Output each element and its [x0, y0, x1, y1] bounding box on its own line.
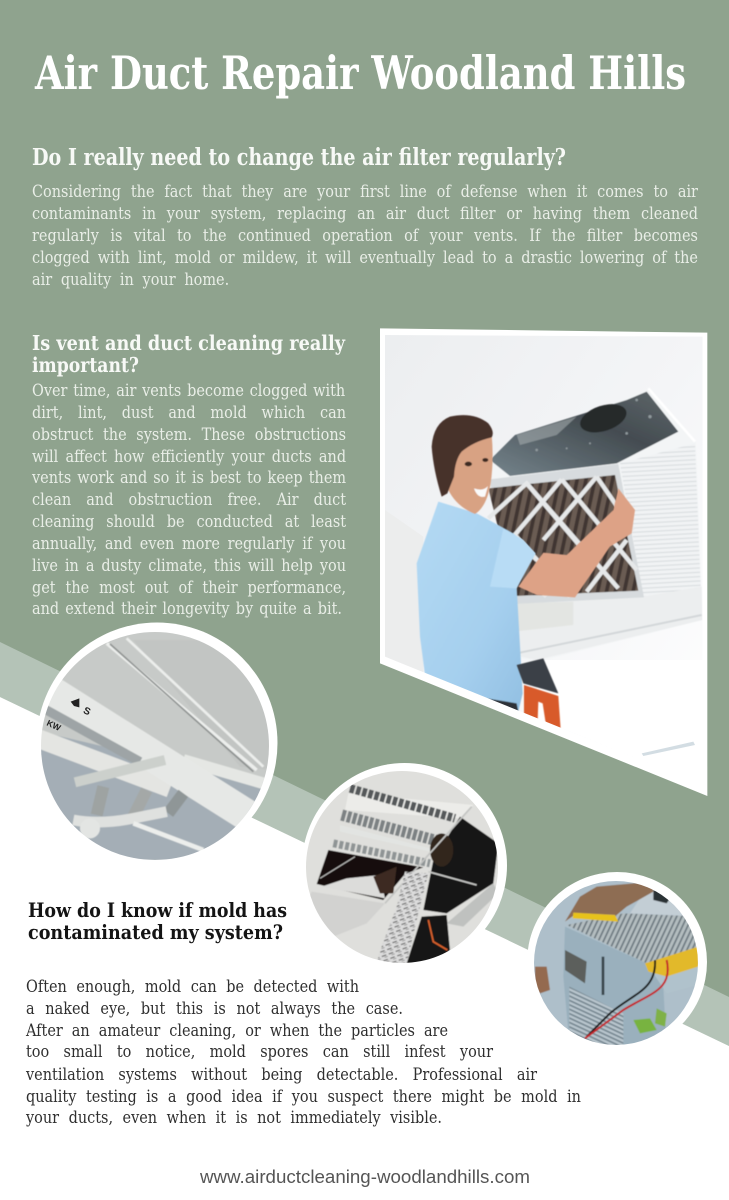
- text block: vent and duct cleaning answer: dirt, lint, dust and mold which can: [32, 403, 346, 423]
- photo circle: white ceiling pipes: S: [81, 705, 92, 718]
- photo circle: technician testing HVAC unit: [527, 872, 707, 1052]
- heading: vent and duct cleaning: important?: [32, 353, 139, 377]
- text block: vent and duct cleaning answer: clean and obstruction free. Air duct: [32, 490, 346, 510]
- photo circle: white ceiling pipes: KW: [45, 718, 63, 733]
- heading: vent and duct cleaning: [32, 331, 346, 377]
- text block: vent and duct cleaning answer: vents work and so it is best to keep them: [32, 468, 346, 488]
- text block: vent and duct cleaning answer: [32, 381, 346, 619]
- vent frame: [488, 388, 702, 662]
- man: [417, 415, 635, 712]
- text block: mold contamination answer: a naked eye, but this is not always the case.: [26, 999, 403, 1019]
- text block: mold contamination answer: your ducts, even when it is not immediately visible.: [26, 1108, 442, 1128]
- text block: vent and duct cleaning answer: obstruct the system. These obstructions: [32, 425, 346, 445]
- text block: mold contamination answer: ventilation systems without being detectable. Professional air: [26, 1065, 537, 1085]
- heading: mold contamination: [28, 899, 287, 944]
- text block: air filter answer: [32, 182, 698, 290]
- air filter: [489, 464, 644, 604]
- text block: mold contamination answer: [26, 977, 581, 1128]
- text block: vent and duct cleaning answer: Over time, air vents become clogged with: [32, 381, 345, 401]
- ladder: [517, 658, 561, 729]
- heading: vent and duct cleaning: Is vent and duct cleaning really: [32, 331, 346, 355]
- text block: mold contamination answer: After an amateur cleaning, or when the particles are: [26, 1021, 448, 1041]
- text block: mold contamination answer: too small to notice, mold spores can still infest your: [26, 1042, 493, 1062]
- text block: vent and duct cleaning answer: annually, and even more regularly if you: [32, 534, 346, 554]
- text block: air filter answer: regularly is vital to the continued operation of your vents. If the filter becomes: [32, 226, 698, 246]
- text block: vent and duct cleaning answer: will affect how efficiently your ducts and: [32, 447, 346, 467]
- photo: technician replacing air filter: [380, 328, 707, 796]
- footer website address: www.airductcleaning-woodlandhills.com: [199, 1166, 530, 1187]
- heading: mold contamination: How do I know if mold has: [28, 899, 287, 922]
- heading: air filter: Do I really need to change the air filter regularly?: [32, 144, 566, 171]
- photo circle: ceiling panel and flexible duct: [302, 763, 507, 968]
- text block: mold contamination answer: quality testing is a good idea if you suspect there might be mold in: [26, 1087, 581, 1107]
- text block: mold contamination answer: Often enough, mold can be detected with: [26, 977, 359, 997]
- text block: vent and duct cleaning answer: live in a dusty climate, this will help you: [32, 556, 346, 576]
- text block: vent and duct cleaning answer: cleaning should be conducted at least: [32, 512, 346, 532]
- text block: air filter answer: air quality in your home.: [32, 270, 229, 290]
- text block: air filter answer: clogged with lint, mold or mildew, it will eventually lead to a drastic lowering of the: [32, 248, 698, 268]
- text block: air filter answer: contaminants in your system, replacing an air duct filter or having them cleaned: [32, 204, 698, 224]
- background: white lower area and light diagonal band: [0, 642, 729, 1200]
- text block: air filter answer: Considering the fact that they are your first line of defense when it comes to air: [32, 182, 698, 202]
- heading: mold contamination: contaminated my system?: [28, 921, 283, 944]
- text block: vent and duct cleaning answer: get the most out of their performance,: [32, 578, 346, 598]
- photo circle: white ceiling pipes: [33, 622, 280, 867]
- text block: vent and duct cleaning answer: and extend their longevity by quite a bit.: [32, 599, 342, 619]
